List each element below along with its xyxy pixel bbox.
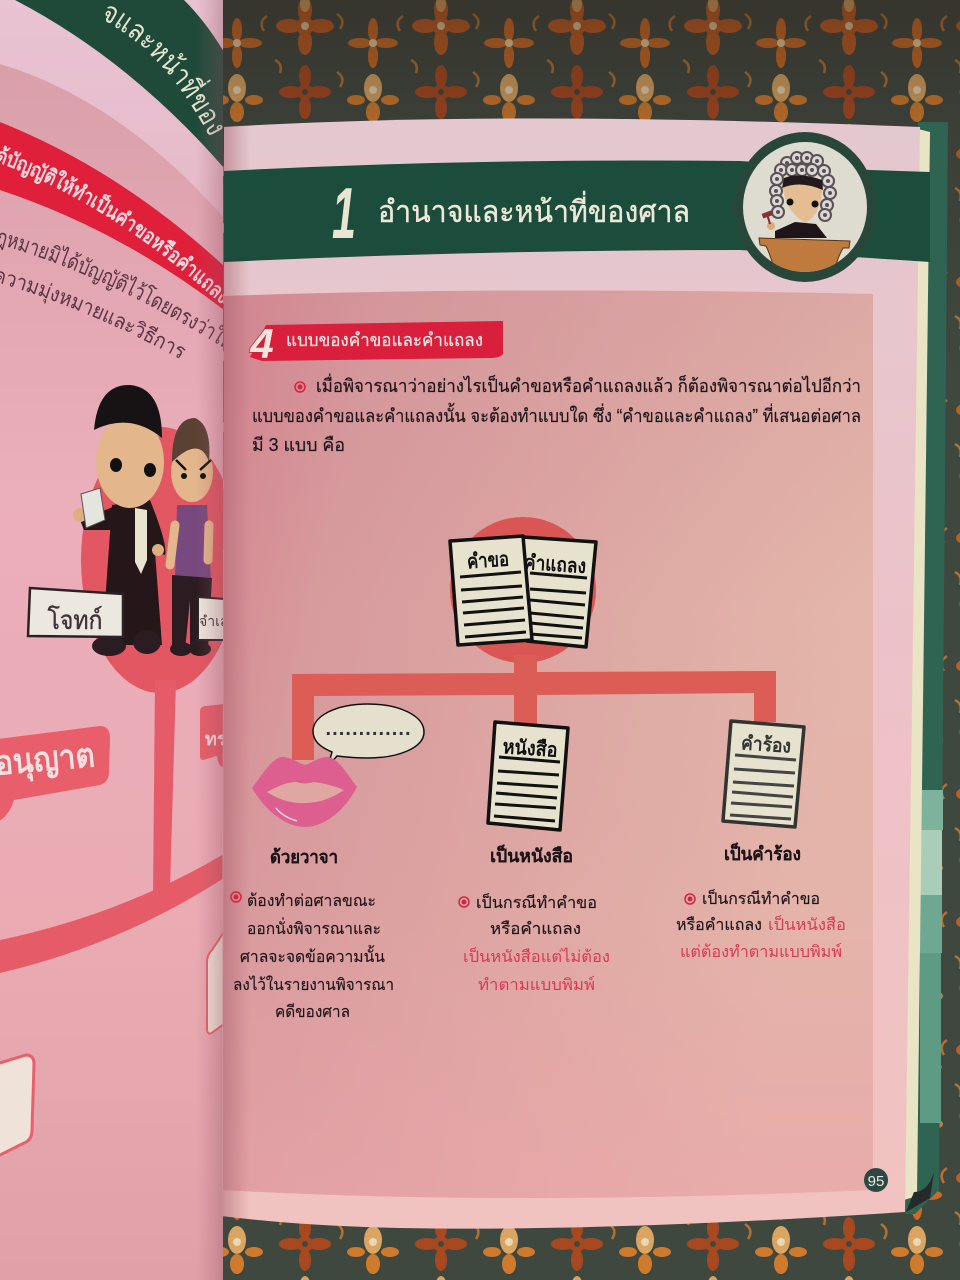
- section number: 4: [249, 320, 274, 367]
- column heading: เป็นคำร้อง: [724, 842, 801, 864]
- column: ด้วยวาจา: ออกนั่งพิจารณาและ: [247, 917, 381, 938]
- intro paragraph: [252, 373, 861, 455]
- book cover edge: [904, 122, 948, 1214]
- page number: 95: [868, 1173, 884, 1190]
- label: defendant: จำเล: [199, 613, 228, 629]
- column: ด้วยวาจา: ลงไว้ในรายงานพิจารณา: [233, 975, 394, 994]
- connector lines: [0, 680, 224, 973]
- document: หนังสือ: [488, 722, 568, 830]
- callout: permission: [0, 726, 110, 825]
- column: เป็นหนังสือ: ทำตามแบบพิมพ์: [478, 975, 595, 994]
- figure: defendant: [170, 418, 213, 656]
- left page: [0, 0, 223, 1280]
- left gutter shade: [200, 0, 223, 1280]
- intro paragraph: แบบของคำขอและคำแถลงนั้น จะต้องทำแบบใด ซึ่ง “คำขอและคำแถลง” ที่เสนอต่อศาล: [252, 403, 861, 426]
- intro paragraph: เมื่อพิจารณาว่าอย่างไรเป็นคำขอหรือคำแถลงแล้ว ก็ต้องพิจารณาต่อไปอีกว่า: [316, 373, 861, 396]
- column: เป็นหนังสือ: เป็นหนังสือแต่ไม่ต้อง: [463, 946, 610, 966]
- document: คำขอ: คำขอ: [466, 549, 510, 573]
- left page diagram: red circle: [81, 427, 223, 693]
- document: คำแถลง: [523, 537, 596, 647]
- left page green band: [15, 0, 223, 167]
- column: เป็นคำร้อง: เป็นกรณีทำคำขอ: [702, 888, 820, 908]
- document: คำร้อง: คำร้อง: [740, 732, 792, 758]
- column: เป็นคำร้อง: [676, 842, 846, 961]
- right page: [222, 118, 920, 1229]
- bullet: [295, 382, 305, 392]
- inner panel: [223, 290, 873, 1198]
- document: คำขอ: [450, 536, 532, 645]
- figure: plaintiff lawyer: [73, 385, 165, 656]
- speech bubble: .............: [326, 718, 410, 740]
- column: ด้วยวาจา: คดีของศาล: [275, 1003, 350, 1021]
- intro paragraph: มี 3 แบบ คือ: [252, 435, 345, 455]
- gutter shadow: [222, 124, 250, 1219]
- bullet: [231, 892, 241, 902]
- page number: [864, 1168, 888, 1192]
- diagram: connector tree: [292, 655, 776, 760]
- callout: acknowledge: [200, 704, 223, 768]
- icon: judge medallion: [734, 132, 876, 290]
- callout: acknowledge: ทราบ: [205, 729, 248, 749]
- section tag: [249, 320, 503, 367]
- left page body text: ฎหมายมิได้บัญญัติไว้โดยตรงว่าให้ทำ: [0, 232, 223, 347]
- column: เป็นคำร้อง: เป็นหนังสือ: [768, 914, 846, 934]
- chapter number: 1: [332, 174, 356, 254]
- column: เป็นหนังสือ: หรือคำแถลง: [490, 920, 581, 938]
- section title: แบบของคำขอและคำแถลง: [286, 330, 483, 350]
- label: defendant: [199, 597, 223, 641]
- label: plaintiff: [28, 588, 123, 637]
- box: lower left: [0, 1055, 34, 1160]
- chapter title: อำนาจและหน้าที่ของศาล: [378, 191, 690, 229]
- box: lower right: [207, 932, 224, 1034]
- column: ด้วยวาจา: ศาลจะจดข้อความนั้น: [240, 945, 385, 966]
- speech bubble: [313, 704, 424, 766]
- document: หนังสือ: หนังสือ: [502, 735, 558, 762]
- diagram: top circle: [450, 517, 596, 663]
- column: ด้วยวาจา: ต้องทำต่อศาลขณะ: [247, 892, 376, 910]
- document: คำแถลง: คำแถลง: [523, 552, 587, 578]
- column: เป็นหนังสือ: เป็นกรณีทำคำขอ: [476, 892, 597, 912]
- column heading: ด้วยวาจา: [270, 847, 338, 867]
- header band: [224, 160, 930, 262]
- bullet: [685, 894, 695, 904]
- left page green band: จและหน้าที่ของ: [106, 6, 222, 135]
- column: เป็นคำร้อง: แต่ต้องทำตามแบบพิมพ์: [680, 942, 842, 961]
- label: plaintiff: โจทก์: [48, 605, 102, 635]
- document: คำร้อง: [723, 721, 804, 827]
- column: ด้วยวาจา: [231, 847, 394, 1021]
- icon: lips: [252, 757, 357, 827]
- column: เป็นคำร้อง: หรือคำแถลง: [676, 916, 762, 934]
- left page inner panel: [0, 64, 223, 440]
- bullet: [459, 897, 469, 907]
- column: เป็นหนังสือ: [459, 844, 610, 994]
- column heading: เป็นหนังสือ: [490, 844, 573, 866]
